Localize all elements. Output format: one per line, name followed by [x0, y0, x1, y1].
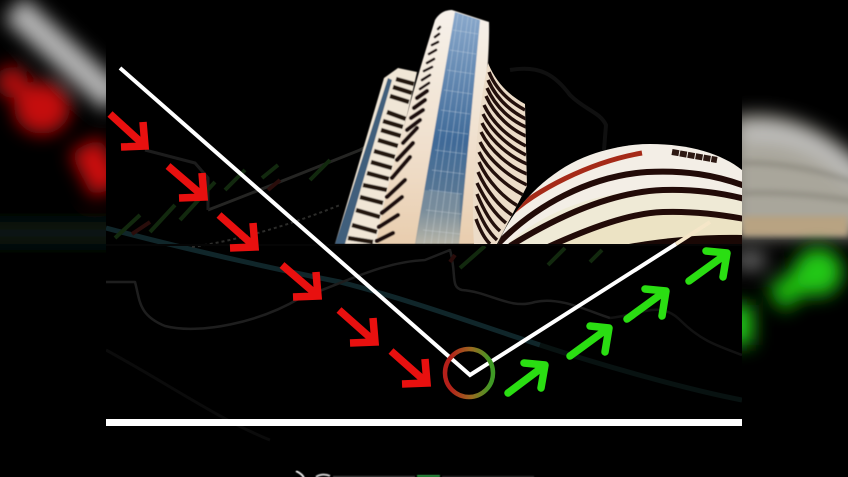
icon: stock exchange dome: [498, 144, 742, 244]
V-shaped trend line: [120, 68, 710, 375]
panel: blurred right side: [730, 115, 848, 345]
arrow 1: [110, 114, 145, 147]
arrow 6: [391, 351, 427, 384]
arrow 2: [168, 166, 204, 198]
icon: stock exchange main tower: [376, 10, 489, 244]
arrow 3: [219, 215, 255, 248]
divider between image halves: [159, 244, 485, 246]
red down arrows: [110, 114, 427, 384]
arrow 4: [689, 251, 727, 281]
panel: central image: [106, 10, 750, 440]
green up arrows: [508, 251, 727, 393]
white horizontal bar: [106, 419, 742, 426]
panel: blurred left side: [0, 0, 106, 250]
chart lines background: [106, 69, 742, 440]
turning-point circle: [445, 349, 493, 397]
arrow 4: [282, 265, 318, 297]
icon: stock exchange curved wing: [473, 63, 527, 244]
arrow 2: [570, 326, 609, 356]
icon: stock exchange outer tower: [335, 68, 417, 244]
cropped logo at bottom edge: [296, 471, 534, 477]
arrow 1: [508, 363, 545, 393]
arrow 3: [627, 289, 666, 319]
arrow 5: [339, 310, 375, 343]
